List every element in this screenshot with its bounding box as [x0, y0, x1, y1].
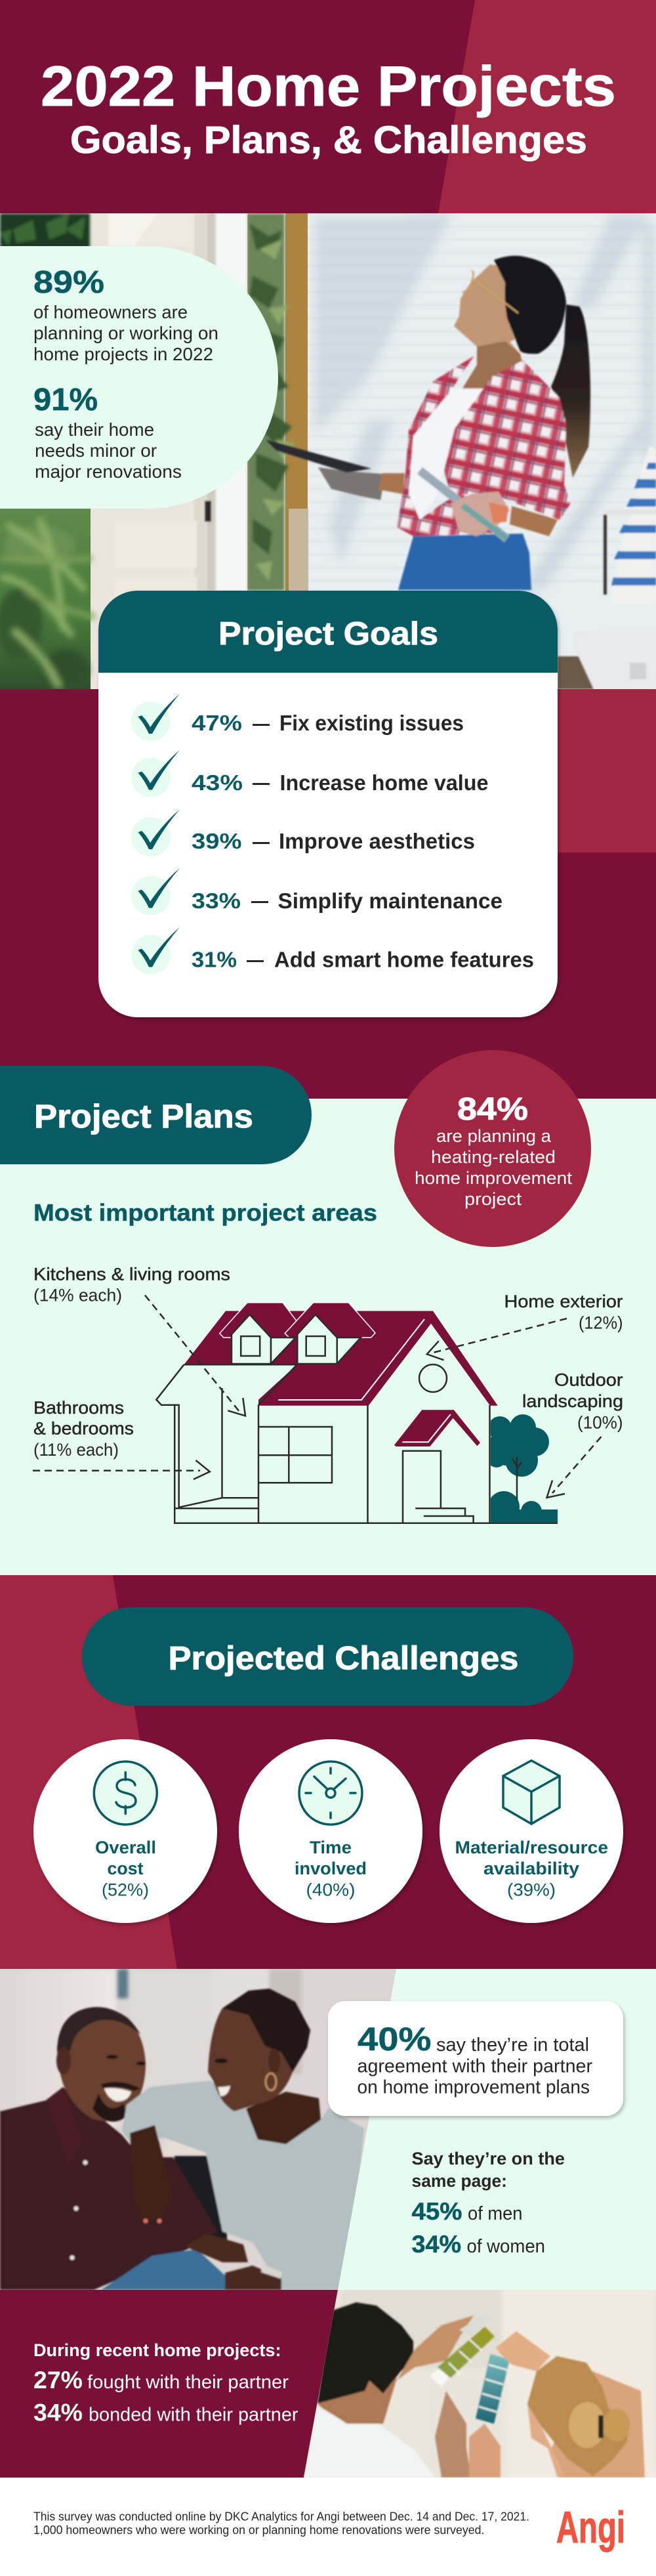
stat: same page by gender	[412, 2149, 565, 2258]
panel: project goals	[98, 591, 558, 1017]
woman's hair	[222, 1989, 310, 2072]
label: bathrooms and bedrooms: (11% each)	[33, 1440, 119, 1460]
forearm and watch	[225, 2266, 281, 2290]
woman's ear	[268, 2048, 280, 2073]
main roof	[184, 1311, 498, 1406]
goal: simplify maintenance	[131, 868, 502, 915]
callout card: 40% agreement: on home improvement plans	[357, 2077, 590, 2098]
callout circle: 84%: project	[464, 1189, 522, 1209]
icon: dollar coin	[94, 1762, 157, 1825]
stat: 91%	[33, 383, 182, 482]
challenge: overall cost: (52%)	[102, 1880, 149, 1899]
header background	[0, 0, 656, 213]
heading: project goals: Project Goals	[218, 616, 438, 652]
stat: same page by gender: of women	[467, 2236, 545, 2257]
label: kitchens and living rooms: Kitchens & living rooms	[33, 1264, 230, 1284]
stats callout blob	[0, 246, 278, 509]
challenge: overall cost: Overall	[95, 1838, 156, 1857]
heading pill: projected challenges: Projected Challenges	[168, 1639, 518, 1676]
logo: Angi: Angi	[556, 2502, 625, 2552]
man's ear	[56, 2047, 71, 2075]
stat: 91%: say their home	[35, 419, 154, 440]
label: bathrooms and bedrooms: & bedrooms	[33, 1419, 134, 1439]
challenge: material availability: availability	[483, 1859, 579, 1878]
title	[41, 55, 616, 161]
panel: during recent home projects	[0, 2290, 338, 2478]
goal: simplify maintenance: 33%	[192, 889, 241, 913]
man's mustache	[101, 2082, 140, 2091]
panel: during recent home projects: During recent home projects:	[33, 2340, 281, 2360]
wood post	[285, 213, 308, 591]
walls and structure	[156, 1364, 558, 1523]
stat: same page by gender: 45%	[412, 2198, 462, 2225]
footer note: This survey was conducted online by DKC Analytics for Angi between Dec. 14 and Dec. 17, 2021.	[33, 2510, 529, 2523]
callout card: 40% agreement: 40%	[358, 2021, 432, 2058]
man's head	[57, 2007, 146, 2121]
label: home exterior: (12%)	[579, 1313, 623, 1332]
challenge: time involved: involved	[295, 1859, 367, 1878]
goal: improve aesthetics: Improve aesthetics	[279, 829, 475, 853]
label: outdoor landscaping	[522, 1370, 623, 1432]
man's hair	[318, 2302, 413, 2403]
panel: during recent home projects: 27%	[33, 2367, 83, 2394]
goal: simplify maintenance: Simplify maintenance	[278, 889, 502, 913]
challenge: time involved: (40%)	[306, 1880, 356, 1899]
stat: 91%: major renovations	[35, 461, 182, 482]
panel: during recent home projects: fought with their partner	[87, 2372, 289, 2393]
man's lower hand	[435, 2391, 471, 2478]
challenge: overall cost	[33, 1739, 217, 1923]
woman's neck	[246, 2092, 321, 2144]
jeans	[101, 2249, 225, 2290]
man's shirt	[304, 2407, 435, 2478]
photo: couple choosing paint swatches	[302, 2290, 656, 2480]
woman's hair	[527, 2356, 629, 2476]
man's arm with hand	[130, 2125, 173, 2220]
striped cushion and stand	[558, 446, 656, 689]
goals section background	[0, 689, 656, 1099]
callout circle: 84%: are planning a	[436, 1126, 552, 1146]
round attic window	[419, 1364, 447, 1392]
plans section background	[0, 1099, 656, 1575]
stat: 89%: of homeowners are	[33, 302, 188, 322]
label: outdoor landscaping: landscaping	[522, 1391, 623, 1411]
man's arm	[397, 2315, 474, 2380]
callout circle: 84%: heating-related	[431, 1147, 556, 1167]
goal: add smart home features: Add smart home features	[274, 948, 534, 971]
woman's upper hand	[496, 2331, 550, 2371]
woman's face	[208, 2002, 293, 2111]
stat: 89%: planning or working on	[33, 323, 218, 343]
challenge: material availability	[440, 1739, 623, 1923]
shirt buttons	[83, 2161, 88, 2164]
stat: 89%: home projects in 2022	[33, 344, 213, 364]
goal: fix existing issues: 47%	[192, 711, 242, 735]
stat: same page by gender: same page:	[412, 2171, 507, 2191]
stat: same page by gender: Say they’re on the	[412, 2149, 565, 2168]
climbing plant	[247, 213, 295, 591]
tree and bushes	[487, 1414, 558, 1523]
goal: increase home value: 43%	[192, 771, 243, 795]
heading pill: project plans: Project Plans	[34, 1098, 253, 1135]
house illustration	[156, 1303, 558, 1523]
callout card: 40% agreement: agreement with their partner	[357, 2056, 592, 2077]
goal: increase home value	[131, 750, 488, 797]
arrow: outdoor landscaping	[547, 1437, 601, 1498]
man's smile	[104, 2088, 131, 2101]
top-left foliage	[0, 213, 92, 246]
challenge: material availability: Material/resource	[455, 1838, 608, 1857]
dormers	[220, 1303, 375, 1364]
stat: 91%: needs minor or	[35, 440, 157, 461]
icon: cube	[503, 1760, 560, 1824]
arrow: home exterior	[427, 1319, 567, 1360]
callout circle: 84%	[394, 1050, 591, 1247]
icon: clock	[299, 1762, 362, 1825]
title: 2022 Home Projects	[41, 55, 616, 118]
door and steps	[403, 1451, 474, 1523]
challenge: material availability: (39%)	[507, 1880, 556, 1899]
challenges section background	[0, 1575, 656, 1969]
woman's arm	[550, 2371, 645, 2478]
label: kitchens and living rooms	[33, 1264, 230, 1305]
man's neck	[318, 2378, 397, 2424]
heading pill: project plans	[0, 1066, 312, 1164]
goal: fix existing issues	[131, 694, 464, 741]
photo: smiling couple on sofa	[0, 1969, 407, 2291]
woman's sweater	[122, 2080, 364, 2290]
door and white post	[90, 213, 247, 689]
man's short hair	[57, 2007, 140, 2051]
goal: add smart home features	[131, 927, 534, 974]
label: outdoor landscaping: (10%)	[577, 1412, 623, 1432]
challenge: time involved	[239, 1739, 422, 1923]
goal: improve aesthetics	[131, 809, 475, 856]
man's shirt	[0, 2087, 218, 2290]
callout circle: 84%: 84%	[457, 1092, 528, 1127]
callout circle: 84%: home improvement	[415, 1168, 573, 1188]
subheading: most important project areas: Most important project areas	[33, 1199, 377, 1226]
woman's hand	[185, 2233, 248, 2262]
mint background: partner stats	[328, 1969, 656, 2290]
challenge: time involved: Time	[310, 1838, 352, 1857]
label: home exterior: Home exterior	[504, 1292, 623, 1311]
goal: fix existing issues: Fix existing issues	[279, 711, 464, 735]
label: home exterior	[504, 1292, 623, 1332]
stat: same page by gender: of men	[468, 2203, 522, 2224]
stat: same page by gender: 34%	[412, 2231, 461, 2258]
stat: 89%	[33, 265, 218, 364]
panel: during recent home projects: 34%	[33, 2399, 83, 2426]
goal: increase home value: Increase home value	[279, 771, 488, 795]
label: bathrooms and bedrooms: Bathrooms	[33, 1398, 124, 1418]
bottom-left foliage	[0, 505, 95, 689]
woman's smile	[218, 2086, 230, 2096]
teal swatch	[476, 2354, 510, 2424]
label: outdoor landscaping: Outdoor	[554, 1370, 623, 1390]
woman's lower hand	[469, 2424, 501, 2478]
stat: 91%: 91%	[33, 383, 98, 417]
arrow: kitchens	[145, 1296, 245, 1416]
callout card: 40% agreement: say they’re in total	[436, 2035, 589, 2056]
goal: improve aesthetics: 39%	[192, 829, 241, 853]
label: bathrooms and bedrooms	[33, 1398, 134, 1460]
olive swatch	[430, 2368, 449, 2387]
arrow: bathrooms	[33, 1460, 210, 1479]
footer note: 1,000 homeowners who were working on or planning home renovations were surveyed.	[33, 2523, 484, 2537]
woman's face edge	[527, 2404, 564, 2478]
goal: add smart home features: 31%	[192, 948, 237, 971]
woman	[266, 256, 590, 590]
porch roof	[394, 1410, 480, 1446]
stat: 89%: 89%	[33, 265, 104, 300]
label: kitchens and living rooms: (14% each)	[33, 1285, 122, 1305]
photo: woman inspecting house with paint brush	[0, 213, 656, 689]
window	[258, 1427, 332, 1483]
challenge: overall cost: cost	[108, 1859, 143, 1878]
title: Goals, Plans, & Challenges	[70, 119, 587, 161]
footer note	[33, 2510, 529, 2537]
dark sofa	[174, 2156, 227, 2241]
heading pill: projected challenges	[82, 1607, 573, 1706]
man's beard	[92, 2094, 127, 2122]
panel: during recent home projects: bonded with their partner	[89, 2405, 298, 2426]
callout card: 40% agreement	[328, 2001, 623, 2116]
